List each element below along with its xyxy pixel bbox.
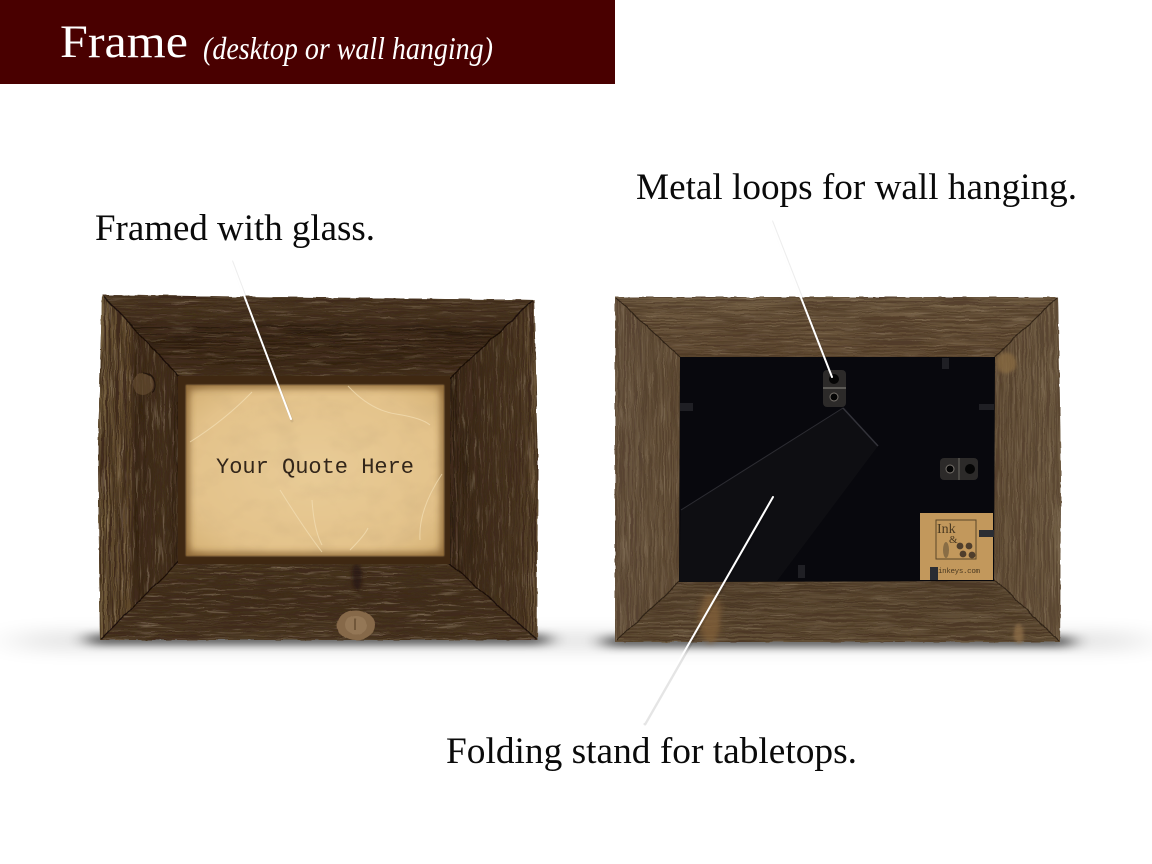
bottom plank — [100, 560, 537, 640]
label: metal loops: Metal loops for wall hanging. — [636, 167, 1077, 208]
back frame photo — [615, 297, 1061, 644]
maker label: inkeys.com — [938, 568, 980, 576]
banner title: Frame — [60, 16, 188, 68]
left plank — [98, 295, 181, 640]
maker label: & — [949, 534, 958, 546]
front wood planks — [98, 295, 538, 640]
metal loop top — [823, 370, 846, 407]
mitre joints — [101, 297, 536, 639]
label: folding stand: Folding stand for tabletops. — [446, 731, 857, 772]
label: framed with glass: Framed with glass. — [95, 208, 375, 249]
backing clips — [680, 358, 994, 578]
left plank — [615, 297, 680, 642]
mitre joints — [616, 298, 1059, 641]
right plank — [448, 300, 538, 640]
right plank — [993, 297, 1061, 642]
header banner — [0, 0, 615, 84]
top plank — [102, 295, 534, 380]
callout line: metal loops — [771, 221, 833, 378]
back wood planks — [615, 297, 1061, 644]
top plank — [615, 297, 1058, 357]
metal loop side — [940, 458, 978, 480]
maker label — [920, 513, 994, 580]
wood knot — [337, 610, 375, 640]
callout line: glass — [231, 261, 292, 421]
bottom plank — [615, 578, 1060, 644]
quote text: Your Quote Here — [216, 455, 414, 480]
maker label: Ink — [937, 522, 956, 537]
aged paper — [178, 376, 450, 564]
front frame photo — [98, 295, 538, 640]
folding stand — [679, 408, 878, 582]
banner subtitle: (desktop or wall hanging) — [203, 30, 493, 66]
ground shadow — [20, 634, 1140, 648]
callout line: folding stand — [644, 497, 774, 724]
black backing board — [679, 357, 995, 582]
